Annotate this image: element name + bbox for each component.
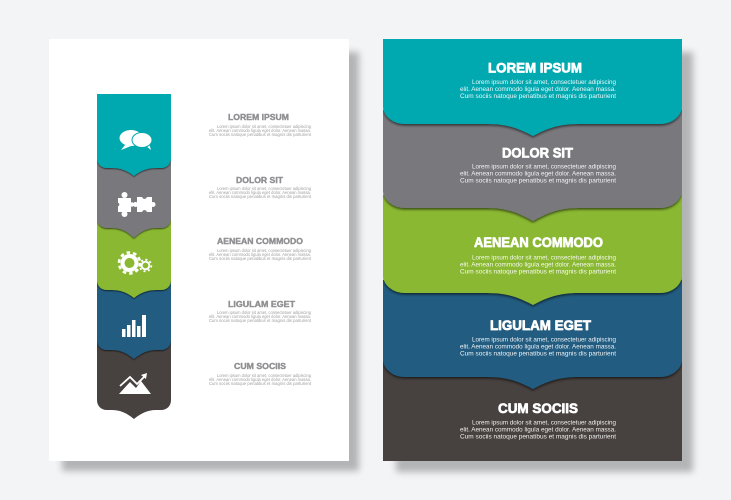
text: right dolor sit	[460, 146, 616, 184]
text: left lorem ipsum: Cum sociis natoque penatibus et magnis dis parturient	[209, 132, 312, 137]
text: left ligulam eget: LIGULAM EGET	[228, 299, 296, 309]
text: left ligulam eget	[209, 299, 312, 323]
band: gray	[383, 110, 682, 221]
tab: teal	[97, 94, 171, 176]
icon: bar chart	[122, 315, 146, 337]
right page shadow	[396, 52, 693, 472]
text: left ligulam eget: Lorem ipsum dolor sit amet, consectetuer adipiscing	[217, 310, 311, 315]
text: left dolor sit: DOLOR SIT	[236, 175, 284, 185]
text: right ligulam eget: Cum sociis natoque penatibus et magnis dis parturient	[460, 350, 616, 358]
text: right dolor sit: Cum sociis natoque penatibus et magnis dis parturient	[460, 178, 616, 184]
icon: speech bubbles	[120, 130, 152, 150]
text: right lorem ipsum: Lorem ipsum dolor sit amet, consectetuer adipiscing	[472, 79, 616, 86]
text: left aenean commodo: elit. Aenean commodo ligula eget dolor. Aenean massa.	[209, 252, 311, 257]
text: left aenean commodo: AENEAN COMMODO	[217, 236, 303, 246]
text: right aenean commodo: Cum sociis natoque penatibus et magnis dis parturient	[460, 268, 616, 276]
text: left cum sociis: Cum sociis natoque penatibus et magnis dis parturient	[209, 381, 312, 386]
text: left dolor sit: elit. Aenean commodo ligula eget dolor. Aenean massa.	[209, 190, 311, 195]
text: right cum sociis: Cum sociis natoque penatibus et magnis dis parturient	[460, 434, 616, 440]
tab: gray	[97, 160, 171, 238]
text: left aenean commodo: Cum sociis natoque penatibus et magnis dis parturient	[209, 256, 312, 261]
tab: dark	[97, 340, 171, 419]
text: left ligulam eget: Cum sociis natoque penatibus et magnis dis parturient	[209, 318, 312, 323]
text: right ligulam eget	[460, 318, 616, 358]
text: left aenean commodo: Lorem ipsum dolor sit amet, consectetuer adipiscing	[217, 248, 311, 253]
band: dark	[383, 360, 682, 461]
text: right dolor sit: elit. Aenean commodo ligula eget dolor. Aenean massa.	[460, 170, 616, 178]
text: right aenean commodo: AENEAN COMMODO	[474, 235, 603, 250]
text: right cum sociis: CUM SOCIIS	[498, 401, 578, 416]
text: right cum sociis: elit. Aenean commodo ligula eget dolor. Aenean massa.	[460, 426, 616, 434]
text: left lorem ipsum: LOREM IPSUM	[228, 112, 289, 122]
text: left dolor sit: Lorem ipsum dolor sit amet, consectetuer adipiscing	[217, 186, 311, 191]
band: green	[383, 195, 682, 305]
text: right aenean commodo: elit. Aenean commodo ligula eget dolor. Aenean massa.	[460, 262, 616, 268]
text: right ligulam eget: elit. Aenean commodo ligula eget dolor. Aenean massa.	[460, 344, 616, 350]
text: left cum sociis: CUM SOCIIS	[234, 361, 286, 371]
text: right lorem ipsum: LOREM IPSUM	[488, 60, 582, 76]
panel: right page	[383, 39, 693, 472]
text: right dolor sit: Lorem ipsum dolor sit amet, consectetuer adipiscing	[472, 164, 616, 170]
band: teal	[383, 39, 682, 136]
text: right ligulam eget: Lorem ipsum dolor sit amet, consectetuer adipiscing	[472, 336, 616, 344]
text: left cum sociis: Lorem ipsum dolor sit amet, consectetuer adipiscing	[217, 373, 311, 378]
tab: blue	[97, 280, 171, 359]
text: right dolor sit: DOLOR SIT	[502, 146, 574, 160]
band: blue	[383, 280, 682, 389]
text: left dolor sit	[209, 175, 312, 199]
text: right cum sociis: Lorem ipsum dolor sit amet, consectetuer adipiscing	[472, 420, 616, 426]
text: right aenean commodo	[460, 235, 616, 276]
tab: green	[97, 220, 171, 298]
text: left cum sociis	[209, 361, 312, 386]
text: left ligulam eget: elit. Aenean commodo ligula eget dolor. Aenean massa.	[209, 314, 311, 319]
text: left lorem ipsum: elit. Aenean commodo ligula eget dolor. Aenean massa.	[209, 128, 311, 133]
left page shadow	[62, 52, 359, 471]
text: right lorem ipsum: elit. Aenean commodo ligula eget dolor. Aenean massa.	[460, 86, 616, 93]
text: left cum sociis: elit. Aenean commodo ligula eget dolor. Aenean massa.	[209, 377, 311, 382]
text: right cum sociis	[460, 401, 616, 440]
icon: mountain trend	[119, 373, 151, 394]
icon: puzzle pieces	[116, 192, 156, 217]
text: left lorem ipsum	[209, 112, 312, 137]
text: right lorem ipsum: Cum sociis natoque penatibus et magnis dis parturient	[460, 93, 616, 100]
text: left dolor sit: Cum sociis natoque penatibus et magnis dis parturient	[209, 194, 312, 199]
panel: left page	[49, 39, 359, 471]
text: left lorem ipsum: Lorem ipsum dolor sit amet, consectetuer adipiscing	[217, 124, 311, 129]
left ribbon: vertical tab strip	[97, 94, 171, 419]
text: right aenean commodo: Lorem ipsum dolor sit amet, consectetuer adipiscing	[472, 254, 616, 262]
text: left aenean commodo	[209, 236, 312, 261]
icon: gears	[119, 252, 151, 274]
left page sheet	[49, 39, 349, 461]
text: right lorem ipsum	[460, 60, 616, 100]
text: right ligulam eget: LIGULAM EGET	[490, 318, 592, 333]
